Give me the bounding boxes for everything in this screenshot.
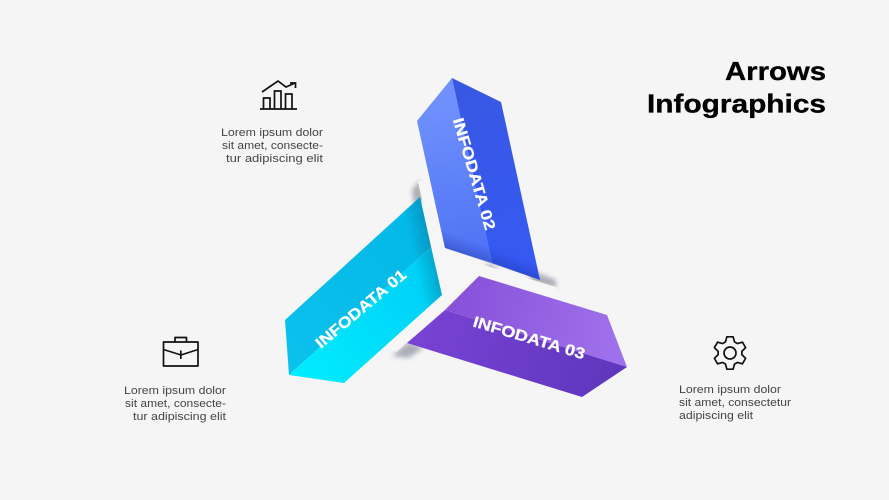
text block: top left: tur adipiscing elit (226, 153, 323, 165)
text block: top left: sit amet, consecte- (222, 140, 323, 152)
icon: briefcase (164, 338, 198, 366)
light bands separating arrows (380, 181, 556, 352)
arrow 03 (407, 276, 627, 397)
arrow 01 end shadow (395, 197, 442, 319)
arrow 02 (417, 78, 540, 280)
text block: bottom left: sit amet, consecte- (125, 398, 226, 410)
label: infodata 02: INFODATA 02 (449, 116, 498, 232)
text block: bottom right: Lorem ipsum dolor (679, 384, 781, 396)
text block: top left (221, 127, 323, 165)
title: Infographics (647, 88, 826, 118)
text block: bottom right (679, 384, 791, 422)
arrow 03 lower face (407, 310, 627, 397)
title: Arrows (725, 56, 826, 86)
text block: top left: Lorem ipsum dolor (221, 127, 323, 139)
arrow 02 left face (417, 78, 492, 263)
text block: bottom left: tur adipiscing elit (133, 411, 226, 423)
soft shadows between arrows (392, 180, 556, 358)
title (647, 56, 826, 118)
icon: gear (714, 337, 746, 369)
arrow 01 lower face (289, 247, 442, 383)
arrow 02 end shadow (440, 225, 540, 280)
text block: bottom right: adipiscing elit (679, 410, 753, 422)
icon: growth chart (260, 81, 297, 109)
text block: bottom left: Lorem ipsum dolor (124, 385, 226, 397)
text block: bottom right: sit amet, consectetur (679, 397, 791, 409)
arrow 02 right face (452, 78, 540, 280)
label: infodata 01: INFODATA 01 (313, 266, 410, 352)
arrow 01 (285, 197, 442, 383)
text block: bottom left (124, 385, 226, 423)
arrow 01 upper face (285, 197, 431, 375)
label: infodata 03: INFODATA 03 (471, 314, 587, 363)
arrow 03 upper face (445, 276, 627, 367)
